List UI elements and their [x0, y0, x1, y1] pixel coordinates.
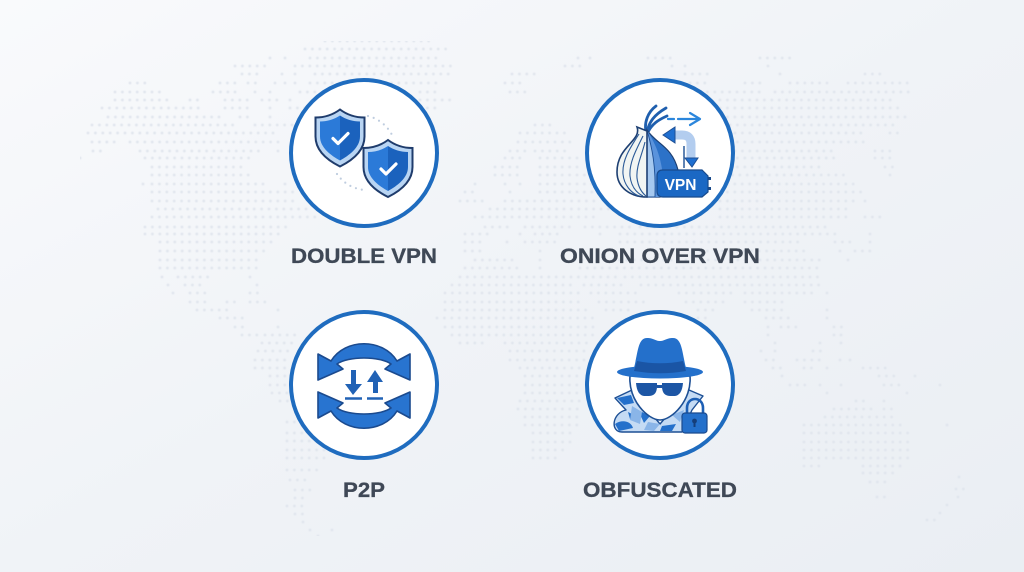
icon: transfer baseline dashes	[345, 397, 383, 400]
icon: dotted connection arcs	[337, 116, 393, 190]
icon: VPN tag: VPN	[665, 177, 696, 194]
label: Double VPN: DOUBLE VPN	[291, 245, 437, 268]
arrow: curved return arrow	[663, 127, 698, 168]
arrow: dashed right arrow	[668, 113, 700, 125]
badge circle: Obfuscated	[587, 312, 733, 458]
icon: upload arrow	[367, 370, 383, 393]
badge circle: Onion over VPN	[587, 80, 733, 226]
icon: download arrow	[345, 370, 362, 395]
panel: P2P	[291, 312, 437, 502]
label: P2P: P2P	[343, 479, 385, 502]
icon: camouflage cloak	[614, 390, 703, 432]
icon: spy face	[630, 376, 690, 420]
icon: padlock	[682, 399, 707, 433]
icon: VPN tag	[657, 170, 711, 197]
icon: sunglasses	[636, 383, 683, 396]
icon: left shield	[316, 110, 364, 166]
dotted world map	[80, 41, 965, 536]
badge circle: P2P	[291, 312, 437, 458]
icon: fedora hat	[617, 338, 703, 378]
panel: Obfuscated	[583, 312, 737, 502]
label: Onion over VPN: ONION OVER VPN	[560, 245, 760, 268]
label: Obfuscated: OBFUSCATED	[583, 479, 737, 502]
icon: onion	[617, 106, 678, 197]
icon: bottom double-headed arc arrow	[318, 392, 410, 428]
icon: right shield	[364, 140, 412, 197]
icon: top double-headed arc arrow	[318, 344, 410, 380]
badge circle: Double VPN	[291, 80, 437, 226]
panel: Double VPN	[291, 80, 437, 268]
panel: Onion over VPN	[560, 80, 760, 268]
